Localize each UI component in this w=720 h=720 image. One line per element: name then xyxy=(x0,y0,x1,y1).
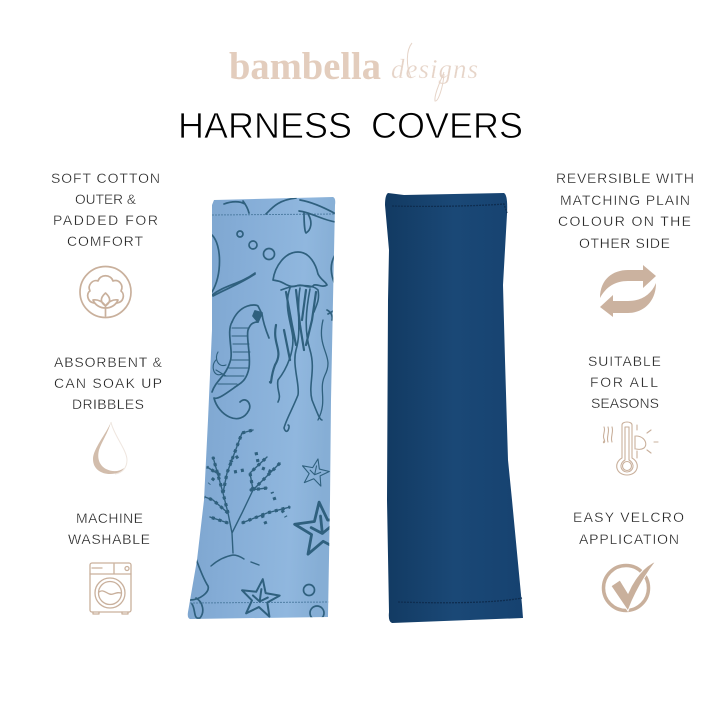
feature text: soft cotton xyxy=(51,170,160,249)
icon: cotton xyxy=(80,266,131,318)
feature text: absorbent: CAN SOAK UP xyxy=(54,375,162,391)
feature text: reversible xyxy=(556,170,694,251)
feature text: absorbent xyxy=(54,354,163,412)
feature text: seasons: SUITABLE xyxy=(588,353,661,369)
feature text: soft cotton: PADDED FOR xyxy=(53,212,158,228)
bottom-left creature xyxy=(190,556,208,618)
title xyxy=(178,105,523,146)
feature text: absorbent: DRIBBLES xyxy=(72,396,144,412)
icon: thermometer and sun xyxy=(603,422,658,475)
logo: bambella designs xyxy=(229,43,478,101)
title: COVERS xyxy=(371,105,523,146)
product: patterned harness cover xyxy=(188,197,351,620)
feature text: machine washable: MACHINE xyxy=(76,510,143,526)
logo: bambella designs: bambella xyxy=(229,45,381,88)
jellyfish xyxy=(270,252,328,431)
feature text: soft cotton: SOFT COTTON xyxy=(51,170,160,186)
icon: check mark circle xyxy=(604,561,656,611)
feature text: machine washable xyxy=(68,510,150,547)
feature text: seasons: FOR ALL xyxy=(590,374,658,390)
feature text: reversible: OTHER SIDE xyxy=(579,235,670,251)
seaweed tree xyxy=(205,430,290,566)
feature text: seasons xyxy=(588,353,661,411)
feature text: velcro: EASY VELCRO xyxy=(573,509,684,525)
feature text: soft cotton: OUTER & xyxy=(75,191,137,207)
feature text: reversible: COLOUR ON THE xyxy=(558,213,691,229)
feature text: machine washable: WASHABLE xyxy=(68,531,150,547)
title: HARNESS xyxy=(178,105,352,146)
bubbles xyxy=(237,231,324,620)
icon: water drop xyxy=(93,422,127,474)
feature text: reversible: REVERSIBLE WITH xyxy=(556,170,694,186)
feature text: reversible: MATCHING PLAIN xyxy=(560,192,690,208)
feature text: seasons: SEASONS xyxy=(591,395,659,411)
top leaves xyxy=(212,198,336,320)
logo: bambella designs: designs xyxy=(391,54,478,84)
feature text: velcro: APPLICATION xyxy=(579,531,679,547)
feature text: velcro xyxy=(573,509,684,547)
starfish xyxy=(302,458,330,487)
feature text: soft cotton: COMFORT xyxy=(67,233,143,249)
icon: washing machine xyxy=(90,563,131,614)
product: plain navy harness cover xyxy=(385,193,523,623)
seahorse xyxy=(212,305,269,419)
icon: reversible arrows xyxy=(600,265,656,317)
feature text: absorbent: ABSORBENT & xyxy=(54,354,163,370)
